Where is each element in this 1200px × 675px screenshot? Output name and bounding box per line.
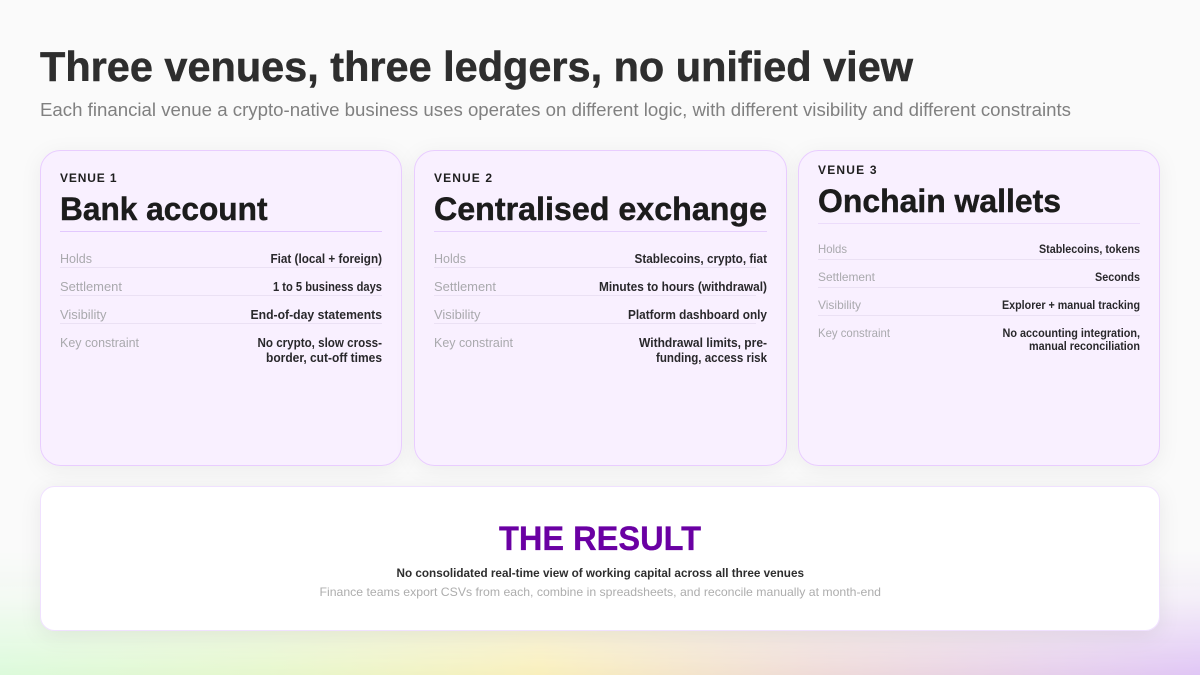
row: key constraint (60, 335, 382, 365)
row: settlement: Settlement (60, 279, 122, 294)
background gradient glow (0, 583, 1200, 675)
row: key constraint: No accounting integration, (1002, 326, 1140, 340)
row: key constraint (818, 326, 1140, 353)
row: holds: Holds (434, 251, 466, 266)
row: key constraint: Key constraint (434, 335, 513, 350)
row: key constraint: border, cut-off times (266, 350, 382, 365)
row: holds: Stablecoins, crypto, fiat (634, 251, 768, 266)
row: visibility: Visibility (60, 307, 107, 322)
panel: venue 1 bank account (40, 150, 402, 466)
row: holds: Fiat (local + foreign) (270, 251, 382, 266)
panel: the result (40, 486, 1160, 630)
row: holds (818, 242, 1140, 260)
row: settlement (818, 270, 1140, 288)
venue 3 heading: Onchain wallets (818, 183, 1061, 219)
row: key constraint: No crypto, slow cross- (258, 335, 382, 350)
row: visibility: Visibility (818, 298, 861, 312)
venue 1 heading: Bank account (60, 191, 268, 227)
result heading: THE RESULT (499, 520, 701, 558)
venue 3 label: VENUE 3 (818, 163, 877, 177)
row: holds (60, 251, 382, 268)
row: visibility (60, 307, 382, 324)
result detail: Finance teams export CSVs from each, combine in spreadsheets, and reconcile manually at month-end (320, 585, 881, 599)
venue 2 label: VENUE 2 (434, 171, 492, 185)
row: holds (434, 251, 768, 268)
row: visibility: End-of-day statements (250, 307, 382, 322)
panel: venue 3 onchain wallets (798, 150, 1160, 466)
row: settlement: Seconds (1095, 270, 1140, 284)
row: visibility: Visibility (434, 307, 481, 322)
row: key constraint: manual reconciliation (1029, 339, 1140, 353)
row: settlement: Settlement (818, 270, 876, 284)
row: settlement: 1 to 5 business days (273, 279, 382, 294)
row: settlement (60, 279, 382, 296)
panel: venue 2 centralised exchange (414, 150, 786, 466)
title: Three venues, three ledgers, no unified view (40, 43, 913, 90)
row: key constraint: Withdrawal limits, pre- (639, 335, 767, 350)
row: holds: Stablecoins, tokens (1039, 242, 1140, 256)
venue 2 heading: Centralised exchange (434, 191, 767, 227)
result statement: No consolidated real-time view of working capital across all three venues (396, 566, 804, 580)
venue 1 label: VENUE 1 (60, 171, 117, 185)
row: key constraint (434, 335, 768, 365)
row: settlement: Minutes to hours (withdrawal) (599, 279, 767, 294)
subtitle: Each financial venue a crypto-native business uses operates on different logic, with different visibility and different constraints (40, 100, 1071, 120)
row: visibility (434, 307, 768, 324)
row: holds: Holds (60, 251, 92, 266)
row: visibility (818, 298, 1140, 316)
row: key constraint: funding, access risk (656, 350, 768, 365)
row: key constraint: Key constraint (818, 326, 891, 340)
row: settlement: Settlement (434, 279, 496, 294)
row: settlement (434, 279, 767, 296)
row: key constraint: Key constraint (60, 335, 139, 350)
row: visibility: Platform dashboard only (628, 307, 768, 322)
row: holds: Holds (818, 242, 847, 256)
row: visibility: Explorer + manual tracking (1002, 298, 1140, 312)
